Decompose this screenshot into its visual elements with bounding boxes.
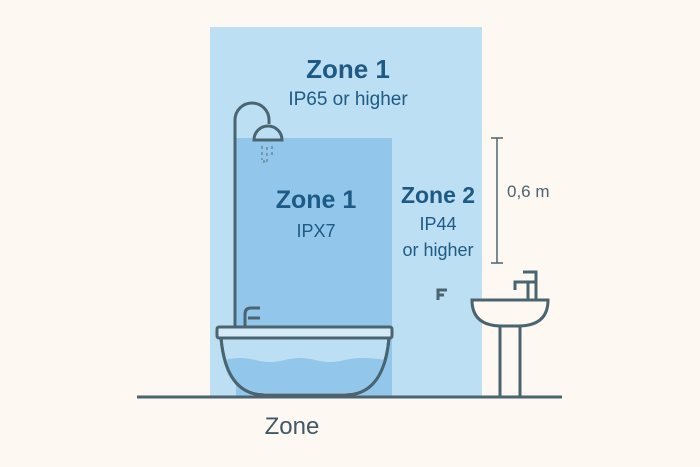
heading: zone 1 inner xyxy=(276,186,356,241)
heading: zone 1 outer xyxy=(288,54,408,110)
panel: zone 1 outer area xyxy=(210,27,482,396)
icon: bathtub xyxy=(217,308,392,395)
measurement: 0,6 m: 0,6 m xyxy=(507,182,550,201)
panel: zone 1 inner area xyxy=(236,138,392,396)
icon: shower xyxy=(235,103,282,330)
heading: zone 1 inner: IPX7 xyxy=(296,221,336,241)
heading: zone 2: Zone 2 xyxy=(401,182,475,208)
label: zone: Zone xyxy=(265,413,319,440)
floor line xyxy=(137,396,562,398)
heading: zone 2: IP44 xyxy=(419,214,457,234)
heading: zone 1 outer: Zone 1 xyxy=(306,54,390,84)
icon: wall tap xyxy=(438,290,447,300)
measurement: 0,6 m xyxy=(491,138,550,263)
heading: zone 2 xyxy=(401,182,475,260)
heading: zone 1 inner: Zone 1 xyxy=(276,186,356,214)
icon: sink xyxy=(472,272,548,396)
heading: zone 2: or higher xyxy=(402,240,474,260)
heading: zone 1 outer: IP65 or higher xyxy=(288,89,408,110)
